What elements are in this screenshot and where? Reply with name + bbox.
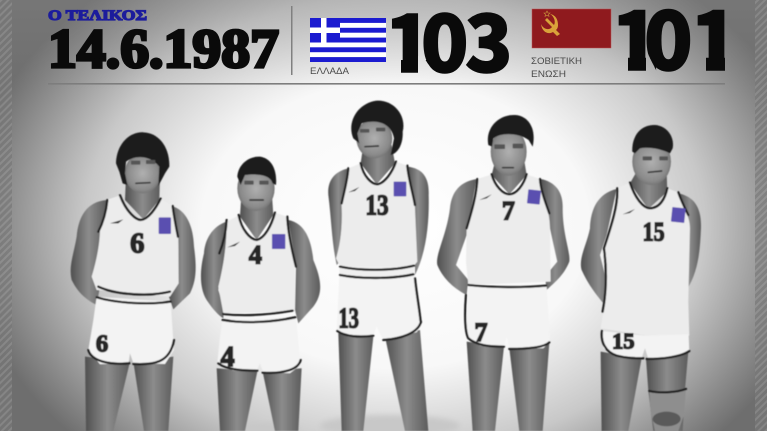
arm left — [581, 189, 617, 303]
face — [356, 118, 392, 158]
mouth — [250, 197, 263, 202]
hair — [488, 115, 534, 147]
jersey 4: 4 — [249, 240, 262, 269]
arm right — [678, 193, 701, 290]
waistband — [339, 267, 414, 277]
arm right — [541, 179, 569, 290]
knee brace — [649, 390, 686, 431]
divider — [291, 6, 292, 75]
leg right — [646, 352, 688, 431]
arm right — [168, 206, 196, 309]
leg right — [385, 330, 428, 431]
neck — [240, 190, 273, 240]
player 7 — [437, 115, 569, 431]
leg right — [263, 368, 302, 431]
header — [48, 6, 725, 85]
jersey — [601, 183, 690, 336]
leg left — [601, 352, 642, 431]
face — [237, 166, 275, 211]
hair — [116, 132, 169, 186]
jersey — [336, 162, 417, 267]
leg right — [133, 357, 173, 431]
hair — [351, 101, 403, 155]
player 15 — [581, 125, 701, 431]
logo — [479, 194, 492, 200]
icon: Soviet flag — [532, 9, 611, 48]
shorts 13: 13 — [338, 303, 359, 335]
logo — [348, 187, 359, 192]
label: Soviet Union — [531, 56, 582, 79]
arm right — [407, 167, 429, 275]
jersey 6: 6 — [130, 228, 144, 260]
label: Soviet Union: ΣΟΒΙΕΤΙΚΗ — [531, 56, 582, 66]
arm left — [328, 168, 348, 265]
mouth — [648, 171, 662, 172]
shorts — [337, 277, 422, 340]
jersey — [466, 174, 551, 285]
jersey 7: 7 — [502, 196, 515, 225]
mouth — [503, 165, 513, 170]
header rule — [48, 83, 725, 85]
shorts 15: 15 — [612, 328, 635, 353]
badge — [272, 234, 285, 249]
date: 14.6.1987 — [48, 18, 279, 79]
eyes — [361, 128, 385, 132]
face — [125, 153, 161, 193]
arm left — [71, 200, 107, 305]
badge — [671, 207, 686, 223]
hair — [237, 157, 276, 185]
jersey — [218, 213, 295, 313]
player 13 — [328, 101, 429, 431]
leg right — [509, 343, 549, 431]
mouth — [136, 180, 150, 186]
face — [491, 128, 527, 176]
jersey — [92, 195, 179, 297]
shorts 6: 6 — [96, 331, 108, 358]
leg left — [85, 357, 130, 431]
neck — [492, 155, 527, 194]
floor shadows — [240, 415, 460, 431]
eyes — [132, 161, 155, 164]
eyes — [245, 181, 268, 184]
eyes — [495, 144, 523, 148]
eyes — [643, 157, 667, 160]
leg left — [338, 333, 373, 431]
logo — [623, 209, 635, 214]
shorts — [466, 286, 550, 349]
shorts 7: 7 — [474, 318, 487, 347]
logo — [227, 242, 240, 247]
kicker: O ΤΕΛΙΚΟΣ: Ο ΤΕΛΙΚΟΣ — [48, 8, 147, 24]
jersey 13: 13 — [365, 189, 389, 221]
label: Soviet Union: ΕΝΩΣΗ — [531, 69, 566, 79]
badge — [394, 182, 406, 196]
leg left — [217, 368, 257, 431]
mouth — [365, 143, 378, 149]
neck — [630, 172, 667, 209]
arm left — [201, 222, 227, 318]
shorts 4: 4 — [221, 342, 235, 373]
player 4 — [201, 157, 320, 431]
leg left — [467, 342, 504, 431]
hair — [632, 125, 673, 153]
label: Greece: ΕΛΛΑΔΑ — [310, 66, 349, 76]
arm left — [437, 179, 477, 295]
shorts — [217, 317, 301, 373]
shorts — [88, 297, 174, 364]
player 6 — [71, 132, 196, 431]
face — [632, 138, 671, 185]
badge — [527, 189, 541, 205]
neck — [125, 177, 160, 219]
neck — [361, 145, 395, 184]
jersey 15: 15 — [643, 217, 665, 246]
shorts — [602, 331, 689, 359]
arm right — [288, 220, 320, 323]
icon: Greek flag — [310, 18, 386, 62]
logo — [110, 219, 123, 223]
badge — [159, 217, 171, 234]
